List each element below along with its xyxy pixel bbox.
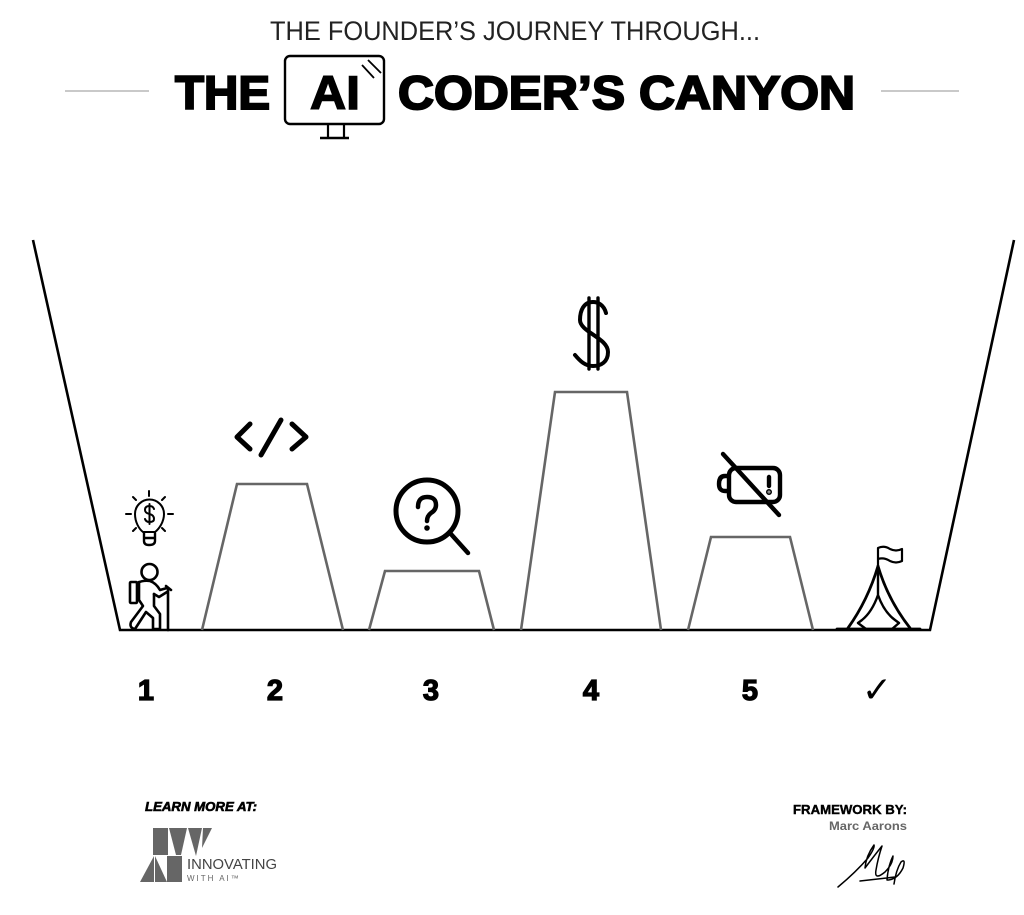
logo: Innovating with AI: [140, 828, 277, 883]
icon: magnifying glass with question mark: [396, 480, 468, 553]
framework credit: Marc Aarons: [829, 819, 907, 833]
signature: [838, 845, 904, 887]
framework credit: [793, 802, 907, 833]
icon: monitor: [285, 56, 384, 138]
canyon walls and floor: [33, 240, 1014, 630]
finish check mark: ✓: [862, 670, 892, 711]
title: [65, 56, 959, 138]
step numbers: [138, 675, 758, 707]
logo: Innovating with AI: WITH AI™: [187, 874, 241, 883]
icon: empty battery crossed out: [719, 454, 780, 515]
step numbers: 1: [138, 675, 154, 707]
subtitle: THE FOUNDER’S JOURNEY THROUGH...: [270, 16, 760, 46]
step numbers: 2: [267, 675, 283, 707]
icon: code brackets: [237, 420, 306, 455]
icon: hiker: [130, 564, 171, 630]
mountain 4: [521, 392, 661, 630]
title: AI: [310, 66, 360, 119]
mountain 3: [369, 571, 494, 630]
framework credit: FRAMEWORK BY:: [793, 802, 907, 817]
mountain 5: [688, 537, 813, 630]
icon: tent with flag: [837, 547, 920, 629]
step numbers: 3: [423, 675, 439, 707]
title: THE: [175, 66, 270, 119]
step numbers: 5: [742, 675, 758, 707]
step numbers: 4: [583, 675, 599, 707]
title: CODER’S CANYON: [398, 66, 855, 119]
icon: dollar sign: [575, 298, 608, 369]
icon: idea light bulb with dollar: [126, 491, 173, 545]
logo: Innovating with AI: INNOVATING: [187, 857, 277, 873]
mountain 2: [202, 484, 343, 630]
learn more label: LEARN MORE AT:: [145, 800, 257, 814]
